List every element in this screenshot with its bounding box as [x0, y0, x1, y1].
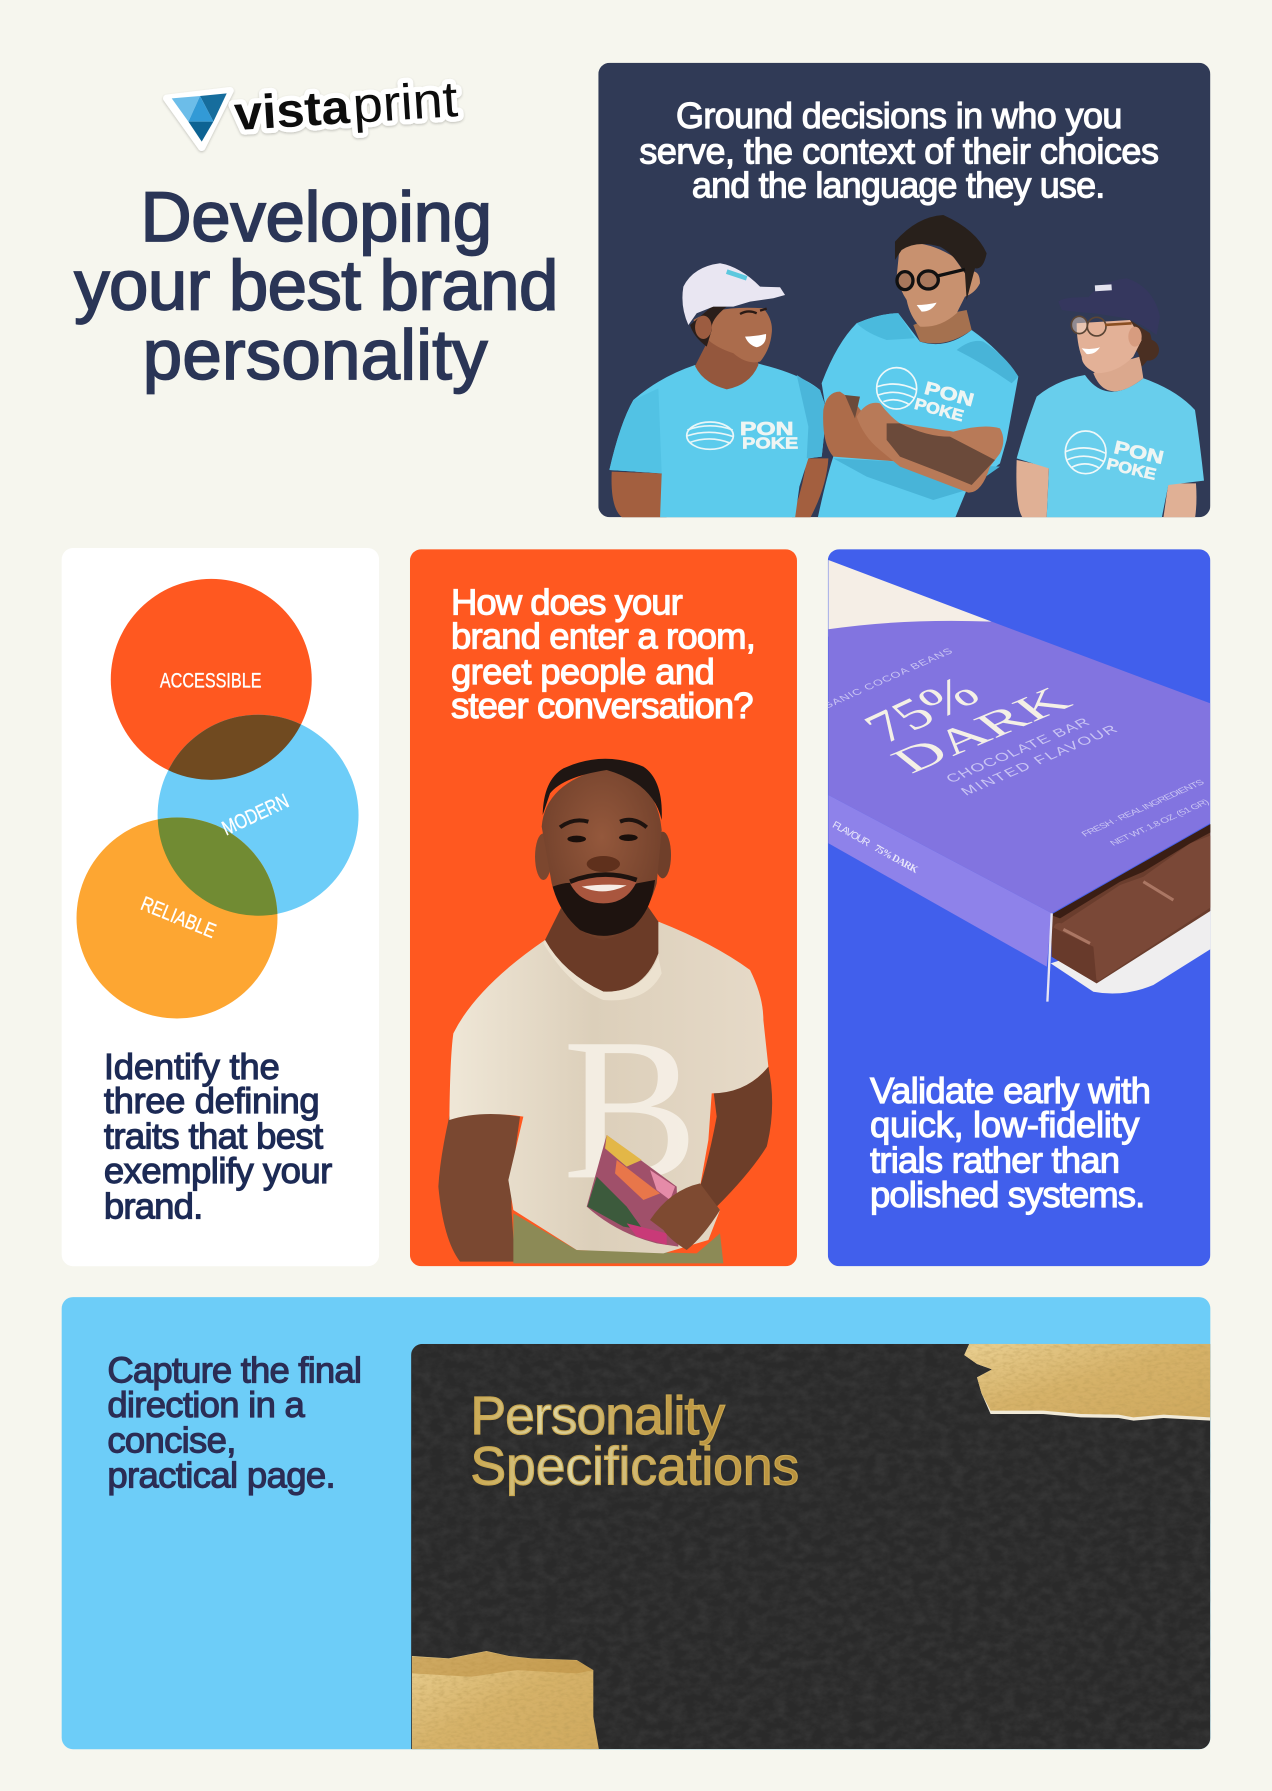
package text: 75% dark: [864, 678, 1074, 774]
panel text: three defining: [104, 1080, 320, 1121]
shirt wordmark: centre: POKE: [912, 396, 966, 425]
panel text: concise,: [107, 1419, 236, 1460]
wordmark: print: [351, 71, 459, 134]
panel text: trials rather than: [870, 1140, 1120, 1181]
shirt wordmark: left: PON: [740, 418, 794, 439]
panel heading: greet people and: [451, 651, 715, 692]
panel text: [107, 1350, 362, 1496]
logo: vistaprint sticker: [167, 71, 459, 147]
gold heading: Specifications: [470, 1436, 799, 1496]
panel: three traits: [62, 548, 379, 1266]
person: left woman: [609, 263, 828, 518]
panel heading: [639, 95, 1159, 206]
panel: validate early: [803, 549, 1212, 1266]
panel heading: serve, the context of their choices: [639, 130, 1159, 171]
wordmark: [232, 71, 459, 141]
chocolate and tray: [1051, 823, 1212, 994]
package text: chocolate bar: MINTED FLAVOUR: [958, 723, 1121, 798]
label: reliable: RELIABLE: [137, 892, 219, 943]
illustration: smiling man holding a card: [438, 759, 772, 1263]
shirt wordmark: right: POKE: [1105, 456, 1158, 484]
panel text: direction in a: [107, 1384, 306, 1425]
package text: spine: [830, 820, 920, 876]
label: modern: MODERN: [218, 790, 292, 840]
title: personality: [143, 316, 488, 395]
package text: chocolate bar: NET WT. 1.8 OZ. (51 GR): [1108, 798, 1212, 848]
package text: chocolate bar: FRESH · REAL INGREDIENTS: [1080, 778, 1207, 839]
gold heading: [470, 1386, 799, 1496]
package text: spine: 75% DARK: [872, 843, 920, 876]
venn diagram: [77, 579, 359, 1018]
panel text: brand.: [104, 1185, 203, 1226]
panel text: quick, low-fidelity: [870, 1104, 1140, 1145]
panel text: Capture the final: [107, 1350, 362, 1391]
shirt wordmark: centre: [914, 381, 974, 422]
package text: chocolate bar: ORGANIC COCOA BEANS: [803, 647, 955, 719]
panel text: [104, 1046, 332, 1226]
sleeve: [828, 560, 1210, 1002]
panel: audience photo on navy: [598, 63, 1210, 518]
panel heading: Ground decisions in who you: [676, 95, 1122, 136]
specification page mockup: [411, 1343, 1210, 1752]
title: [74, 178, 558, 395]
shirt wordmark: right: PON: [1112, 436, 1166, 468]
person: centre man with crossed arms: [818, 215, 1018, 518]
panel text: exemplify your: [104, 1150, 332, 1191]
shirt monogram: B: [563, 996, 698, 1221]
gold foil: top right: [964, 1343, 1210, 1421]
package text: chocolate bar: [803, 647, 1212, 848]
label: accessible: ACCESSIBLE: [160, 667, 261, 692]
panel text: traits that best: [104, 1116, 323, 1157]
wordmark: vista: [233, 81, 351, 141]
person: right woman: [1016, 278, 1204, 518]
panel text: polished systems.: [870, 1174, 1145, 1215]
shirt wordmark: centre: PON: [922, 377, 976, 410]
panel: brand in a room: [410, 549, 797, 1266]
package text: chocolate bar: CHOCOLATE BAR: [943, 716, 1093, 786]
illustration: chocolate bar in purple sleeve: [828, 560, 1212, 1002]
panel heading: [451, 581, 756, 726]
package text: 75% dark: 75%: [852, 667, 991, 752]
shirt wordmark: left: [741, 422, 798, 449]
gold foil: bottom left: [412, 1651, 599, 1752]
title: your best brand: [74, 246, 558, 325]
panel text: Identify the: [104, 1046, 280, 1087]
panel heading: How does your: [451, 581, 683, 622]
shirt wordmark: right: [1106, 440, 1164, 480]
panel text: [870, 1070, 1151, 1215]
package text: 75% dark: DARK: [881, 680, 1082, 781]
panel text: practical page.: [107, 1455, 336, 1496]
panel heading: brand enter a room,: [451, 616, 756, 657]
package text: spine: FLAVOUR: [830, 820, 872, 849]
title: Developing: [140, 178, 492, 257]
shirt wordmark: left: POKE: [742, 436, 799, 453]
panel heading: steer conversation?: [451, 685, 754, 726]
gold heading: Personality: [470, 1386, 725, 1446]
panel text: Validate early with: [870, 1070, 1151, 1111]
panel heading: and the language they use.: [692, 165, 1105, 206]
panel: capture the final direction: [62, 1297, 1210, 1752]
icon: faceted V mark: [167, 91, 230, 147]
